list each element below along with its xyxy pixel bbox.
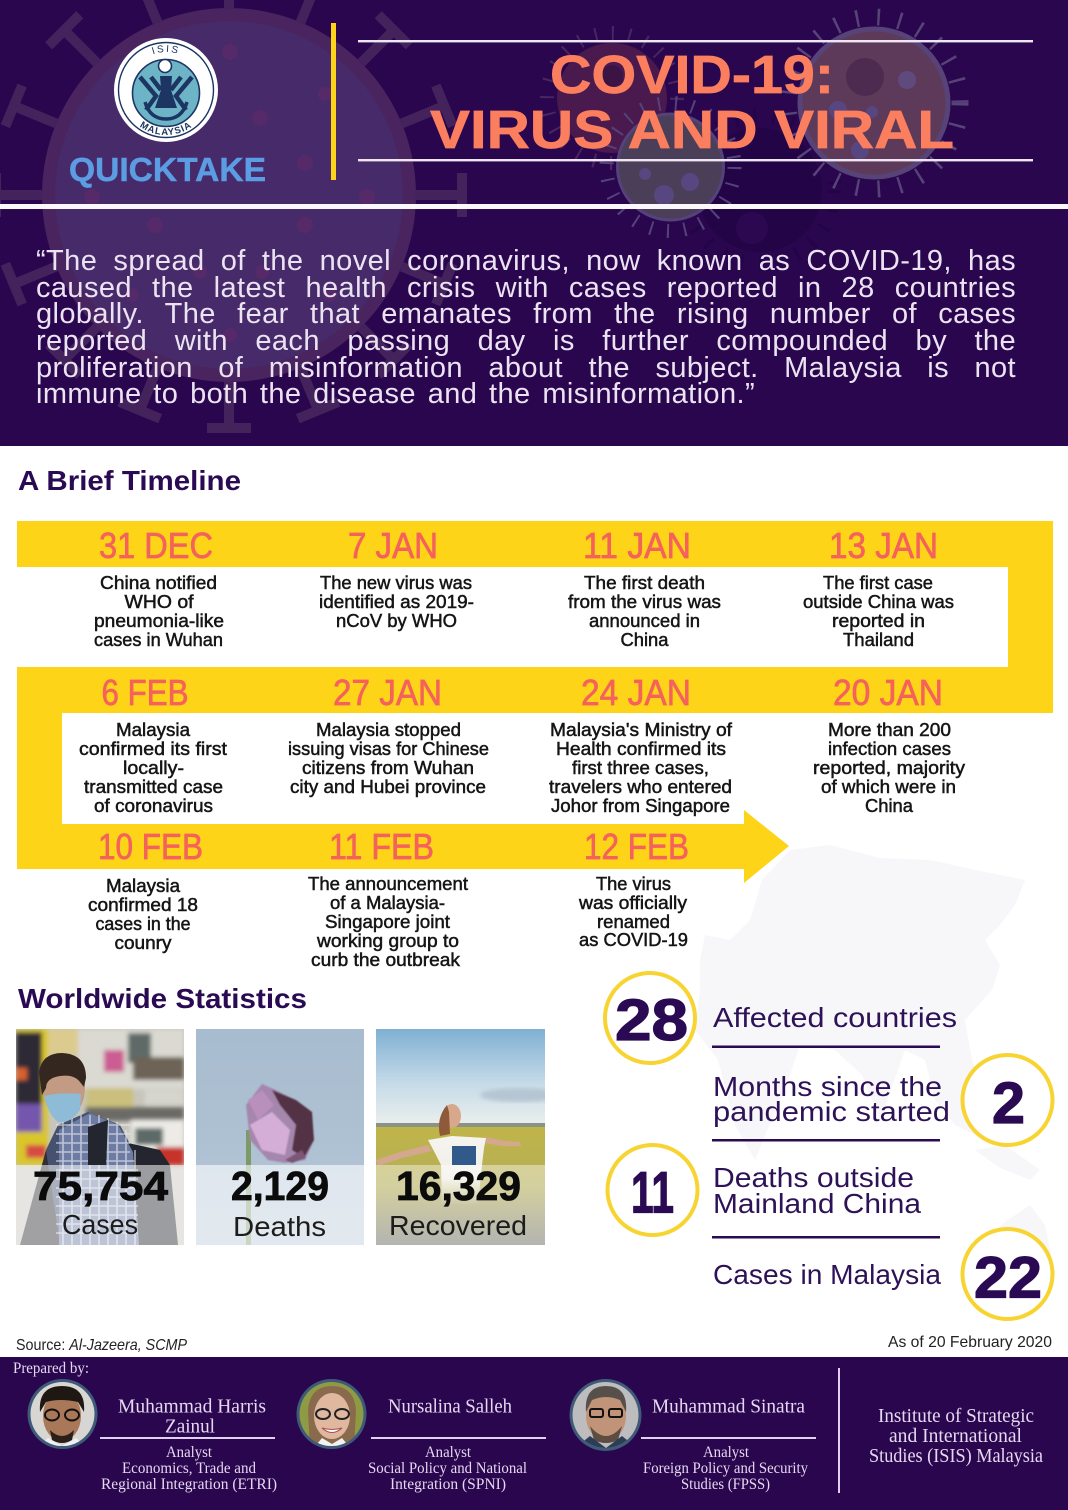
- author: Muhammad Sinatra: [570, 1379, 816, 1493]
- event: 13 Jan: Thailand: [843, 629, 914, 650]
- stat card: recovered: [376, 1029, 560, 1245]
- event: 11 Feb: 11 FEB: [329, 826, 434, 867]
- event: 20 Jan: China: [865, 795, 914, 816]
- divider: white header rule: [0, 204, 1068, 209]
- event: 7 Jan: 7 JAN: [348, 525, 438, 566]
- intro quote paragraph: proliferation of misinformation about the subject. Malaysia is not: [36, 352, 1016, 384]
- stat: 28 affected countries: 28: [615, 988, 688, 1053]
- event: 31 Dec: WHO of: [124, 591, 194, 612]
- stat: 28 affected countries: Affected countries: [713, 1002, 957, 1033]
- event: 11 Jan: 11 JAN: [583, 525, 691, 566]
- event: 10 Feb: 10 FEB: [98, 826, 203, 867]
- event: 24 Jan: Health confirmed its: [556, 738, 726, 759]
- stat card: cases: Cases: [62, 1209, 138, 1240]
- icon: large background virus: [0, 0, 467, 433]
- stat: 2 months since the pandemic started: [712, 1055, 1052, 1145]
- author: Muhammad Harris Zainul: [28, 1379, 277, 1493]
- brand label: QUICKTAKE: QUICKTAKE: [69, 151, 266, 188]
- event: 31 Dec: China notified: [100, 572, 217, 593]
- event: 13 Jan: reported in: [832, 610, 925, 631]
- stat: 2 months since the pandemic started: 2: [992, 1071, 1025, 1136]
- logo: ISIS Malaysia emblem: MALAYSIA: [140, 121, 192, 135]
- stat card: deaths: Deaths: [233, 1211, 326, 1242]
- event: 31 Dec: 31 DEC: [99, 525, 213, 566]
- author: Muhammad Harris Zainul: Muhammad Harris: [118, 1396, 266, 1418]
- author: Nursalina Salleh: Nursalina Salleh: [388, 1396, 512, 1418]
- stat card: recovered: Recovered: [389, 1210, 527, 1241]
- institute name: Studies (ISIS) Malaysia: [869, 1445, 1043, 1467]
- stat card: cases: 75,754: [33, 1163, 168, 1209]
- event: 11 Feb: Singapore joint: [325, 911, 450, 932]
- stat: 2 months since the pandemic started: pandemic started: [713, 1096, 950, 1127]
- author: Muhammad Sinatra: Foreign Policy and Security: [643, 1460, 808, 1477]
- panel: footer credits: [0, 1357, 1068, 1510]
- date note: As of 20 February 2020: [888, 1334, 1052, 1351]
- event: 6 Feb: transmitted case: [84, 776, 223, 797]
- event: 11 Feb: of a Malaysia-: [330, 892, 445, 913]
- author: Nursalina Salleh: [296, 1379, 546, 1493]
- event: 11 Feb: The announcement: [308, 873, 468, 894]
- icon: red background virus: [547, 33, 677, 163]
- heading: Worldwide Statistics: Worldwide Statistics: [18, 983, 307, 1014]
- icon: large mauve background virus: [788, 17, 960, 189]
- author: Nursalina Salleh: Social Policy and National: [368, 1460, 528, 1477]
- divider: yellow vertical rule: [331, 23, 336, 180]
- event: 11 Jan: [568, 525, 721, 650]
- event: 11 Jan: announced in: [589, 610, 700, 631]
- event: 7 Jan: identified as 2019-: [319, 591, 474, 612]
- intro quote paragraph: [36, 245, 1016, 410]
- title block: COVID-19:: [550, 45, 834, 105]
- logo: ISIS Malaysia emblem: [114, 38, 218, 142]
- timeline: second row: [79, 672, 966, 816]
- world map background: [695, 845, 1052, 1300]
- event: 6 Feb: of coronavirus: [94, 795, 213, 816]
- source note: Source: Al-Jazeera, SCMP: [16, 1337, 187, 1354]
- event: 24 Jan: 24 JAN: [581, 672, 691, 713]
- intro quote paragraph: caused the latest health crisis with cases reported in 28 countries: [36, 272, 1016, 304]
- event: 20 Jan: of which were in: [821, 776, 956, 797]
- intro quote paragraph: immune to both the disease and the misinformation.”: [36, 378, 755, 410]
- event: 10 Feb: Malaysia: [106, 875, 181, 896]
- event: 24 Jan: Johor from Singapore: [551, 795, 730, 816]
- stat card: cases: [16, 1029, 184, 1245]
- stat card: deaths: 2,129: [231, 1163, 329, 1209]
- event: 13 Jan: The first case: [823, 572, 933, 593]
- event: 10 Feb: confirmed 18: [88, 894, 198, 915]
- event: 12 Feb: 12 FEB: [584, 826, 689, 867]
- event: 31 Dec: pneumonia-like: [94, 610, 224, 631]
- stat: 2 months since the pandemic started: Months since the: [713, 1071, 942, 1102]
- author: Muhammad Harris Zainul: Analyst: [166, 1444, 213, 1461]
- event: 20 Jan: 20 JAN: [833, 672, 943, 713]
- event: 20 Jan: More than 200: [828, 719, 951, 740]
- event: 20 Jan: reported, majority: [813, 757, 966, 778]
- author: Muhammad Sinatra: Muhammad Sinatra: [652, 1396, 805, 1418]
- stat: 22 cases in Malaysia: [713, 1229, 1052, 1319]
- panel: header background: [0, 0, 1068, 446]
- timeline: third row: [88, 826, 689, 970]
- event: 27 Jan: city and Hubei province: [290, 776, 486, 797]
- event: 27 Jan: 27 JAN: [333, 672, 442, 713]
- event: 27 Jan: issuing visas for Chinese: [288, 738, 489, 759]
- event: 6 Feb: 6 FEB: [102, 672, 188, 713]
- event: 13 Jan: [803, 525, 954, 650]
- event: 6 Feb: Malaysia: [116, 719, 191, 740]
- event: 12 Feb: renamed: [597, 911, 670, 932]
- stat card: recovered: 16,329: [396, 1163, 521, 1209]
- event: 12 Feb: was officially: [578, 892, 688, 913]
- event: 6 Feb: [79, 672, 227, 816]
- event: 12 Feb: as COVID-19: [579, 929, 688, 950]
- author: Muhammad Harris Zainul: Regional Integration (ETRI): [101, 1476, 277, 1493]
- event: 12 Feb: The virus: [596, 873, 671, 894]
- stat: 11 deaths outside mainland China: Deaths outside: [713, 1162, 914, 1193]
- event: 11 Feb: curb the outbreak: [311, 949, 461, 970]
- icon: grey background virus: [606, 103, 734, 231]
- event: 13 Jan: outside China was: [803, 591, 954, 612]
- event: 27 Jan: Malaysia stopped: [316, 719, 461, 740]
- title block: VIRUS AND VIRAL: [430, 100, 954, 160]
- author: Muhammad Sinatra: Analyst: [703, 1444, 750, 1461]
- event: 10 Feb: [88, 826, 203, 953]
- stat card: deaths: [196, 1029, 364, 1245]
- event: 24 Jan: Malaysia's Ministry of: [550, 719, 733, 740]
- stat: 28 affected countries: [605, 973, 957, 1063]
- title block: [358, 40, 1033, 161]
- event: 24 Jan: [549, 672, 733, 816]
- author: Nursalina Salleh: Analyst: [425, 1444, 472, 1461]
- stat: 22 cases in Malaysia: 22: [974, 1246, 1042, 1310]
- event: 24 Jan: first three cases,: [572, 757, 709, 778]
- institute name: [869, 1405, 1043, 1467]
- event: 11 Jan: The first death: [584, 572, 705, 593]
- intro quote paragraph: “The spread of the novel coronavirus, now known as COVID-19, has: [36, 245, 1016, 277]
- intro quote paragraph: reported with each passing day is further compounded by the: [36, 325, 1016, 357]
- event: 11 Feb: working group to: [316, 930, 459, 951]
- stat: 11 deaths outside mainland China: Mainland China: [713, 1188, 921, 1219]
- event: 6 Feb: confirmed its first: [79, 738, 227, 759]
- event: 31 Dec: cases in Wuhan: [94, 629, 223, 650]
- timeline: first row: [94, 525, 954, 650]
- timeline ribbon arrow: [17, 521, 1053, 883]
- event: 11 Feb: [308, 826, 468, 970]
- event: 7 Jan: The new virus was: [320, 572, 472, 593]
- stat: 11 deaths outside mainland China: 11: [631, 1160, 674, 1226]
- institute name: Institute of Strategic: [878, 1405, 1034, 1427]
- event: 11 Jan: China: [620, 629, 669, 650]
- event: 10 Feb: counry: [114, 932, 172, 953]
- logo: ISIS Malaysia emblem: ISIS: [152, 45, 178, 54]
- icon: dark background virus: [686, 116, 834, 264]
- event: 10 Feb: cases in the: [96, 913, 190, 934]
- event: 7 Jan: [319, 525, 474, 631]
- heading: A Brief Timeline: A Brief Timeline: [18, 465, 241, 496]
- author: Muhammad Harris Zainul: Zainul: [165, 1416, 215, 1438]
- event: 20 Jan: [813, 672, 966, 816]
- stat: 11 deaths outside mainland China: [608, 1145, 940, 1238]
- event: 31 Dec: [94, 525, 224, 650]
- event: 11 Jan: from the virus was: [568, 591, 721, 612]
- author: Nursalina Salleh: Integration (SPNI): [390, 1476, 506, 1493]
- institute name: and International: [889, 1425, 1022, 1447]
- event: 24 Jan: travelers who entered: [549, 776, 732, 797]
- intro quote paragraph: globally. The fear that emanates from the rising number of cases: [36, 298, 1016, 330]
- event: 6 Feb: locally-: [123, 757, 184, 778]
- author: Muhammad Harris Zainul: Economics, Trade and: [122, 1460, 256, 1477]
- stat: 22 cases in Malaysia: Cases in Malaysia: [713, 1259, 941, 1290]
- event: 27 Jan: citizens from Wuhan: [302, 757, 474, 778]
- event: 27 Jan: [288, 672, 489, 797]
- author: Muhammad Sinatra: Studies (FPSS): [681, 1476, 770, 1493]
- event: 7 Jan: nCoV by WHO: [336, 610, 457, 631]
- event: 13 Jan: 13 JAN: [829, 525, 938, 566]
- event: 20 Jan: infection cases: [828, 738, 951, 759]
- event: 12 Feb: [578, 826, 689, 950]
- label: prepared by: Prepared by:: [13, 1360, 89, 1377]
